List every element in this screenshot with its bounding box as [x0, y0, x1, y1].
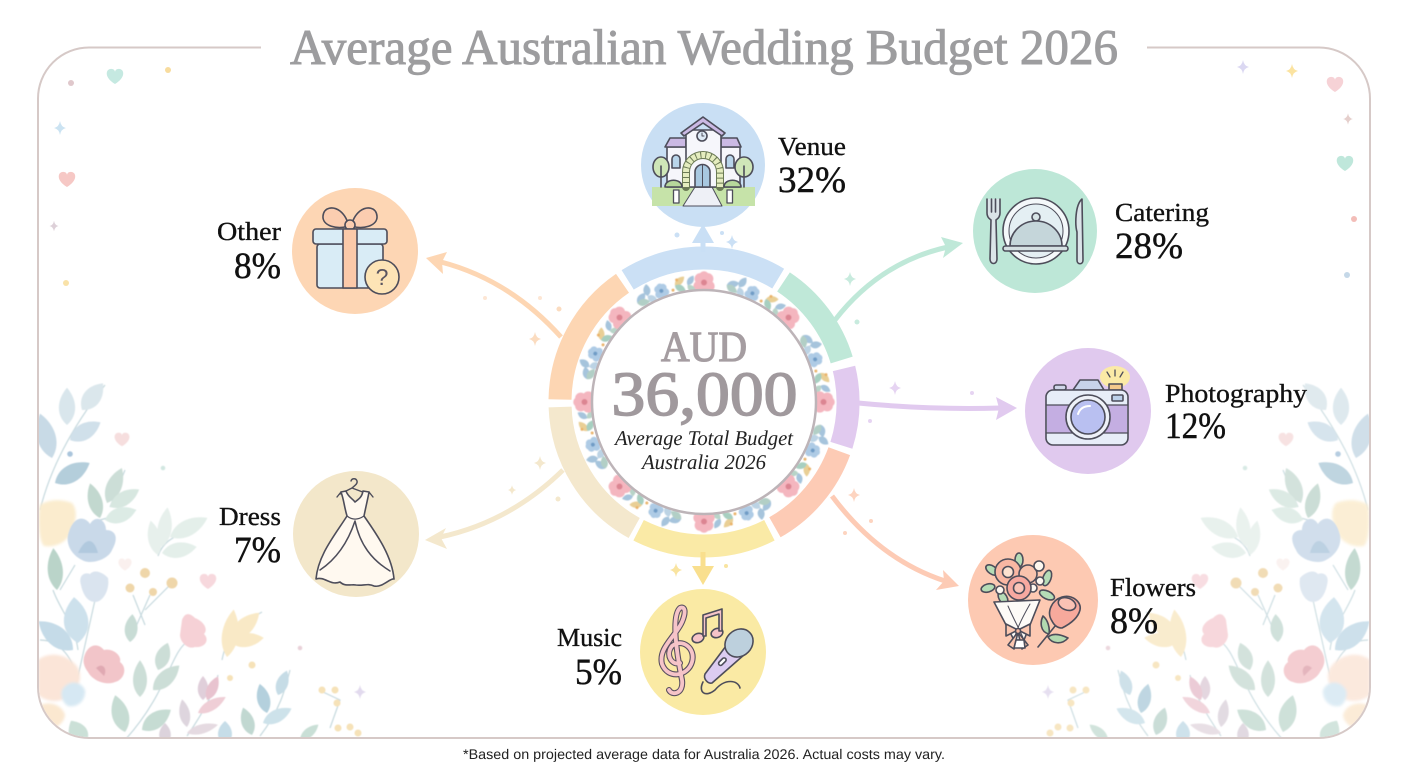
icon: photography — [1025, 348, 1151, 474]
icon: catering — [973, 169, 1097, 293]
center caption — [613, 426, 794, 474]
title: Average Australian Wedding Budget 2026 — [290, 19, 1118, 75]
label: music — [557, 623, 622, 693]
label: flowers: Flowers — [1110, 573, 1196, 602]
foliage: bottom-right corner — [1042, 378, 1377, 750]
icon: dress — [293, 471, 419, 597]
label: dress — [219, 502, 281, 571]
arrow: other — [426, 252, 561, 337]
arrow: flowers — [832, 496, 959, 590]
label: photography: 12% — [1165, 406, 1226, 447]
icon: other: ? — [376, 264, 388, 290]
center caption: Average Total Budget — [613, 426, 794, 450]
label: venue: 32% — [778, 160, 846, 201]
label: music: 5% — [575, 652, 622, 693]
small flower — [80, 571, 108, 602]
icon: music — [640, 589, 766, 715]
segment: dress — [560, 407, 634, 528]
arrow: dress — [425, 470, 563, 549]
pink flower — [84, 645, 124, 683]
label: dress: Dress — [219, 502, 281, 531]
center caption: Australia 2026 — [640, 450, 766, 474]
label: other: 8% — [234, 246, 281, 287]
segment: venue — [628, 258, 778, 280]
label: flowers: 8% — [1110, 601, 1158, 642]
icon: venue — [641, 103, 765, 227]
label: venue: Venue — [778, 132, 846, 161]
label: photography: Photography — [1165, 379, 1307, 408]
segment: catering — [784, 282, 842, 360]
total amount: 36,000 — [612, 359, 798, 429]
arrow: catering — [835, 237, 963, 320]
label: other — [217, 217, 281, 287]
center budget circle — [592, 290, 816, 514]
arrow: venue — [692, 224, 714, 252]
segment: other — [560, 283, 622, 400]
arrow: photography — [858, 397, 1017, 420]
label: dress: 7% — [234, 530, 281, 571]
icon: flowers — [968, 535, 1098, 665]
arrow: music — [692, 552, 714, 585]
floral wreath — [551, 249, 857, 555]
watercolor foliage: bottom corners — [31, 378, 1377, 750]
label: catering: Catering — [1115, 198, 1209, 227]
footnote: *Based on projected average data for Australia 2026. Actual costs may vary. — [463, 746, 945, 762]
corner decorations: hearts, sparkles, dots — [50, 60, 1357, 286]
label: flowers — [1110, 573, 1196, 642]
label: photography — [1165, 379, 1307, 447]
segment: photography — [841, 368, 848, 445]
currency label: AUD — [661, 324, 747, 371]
segment: music — [639, 530, 769, 546]
label: other: Other — [217, 217, 281, 246]
donut ring segments — [560, 258, 848, 546]
label: catering: 28% — [1115, 226, 1183, 267]
foliage: bottom-left corner — [31, 378, 366, 750]
sparkles around arrows — [483, 231, 974, 577]
label: catering — [1115, 198, 1209, 267]
segment: flowers — [775, 451, 839, 527]
label: music: Music — [557, 623, 622, 652]
blue flower — [68, 519, 116, 562]
icon: other — [292, 188, 418, 314]
label: venue — [778, 132, 846, 201]
